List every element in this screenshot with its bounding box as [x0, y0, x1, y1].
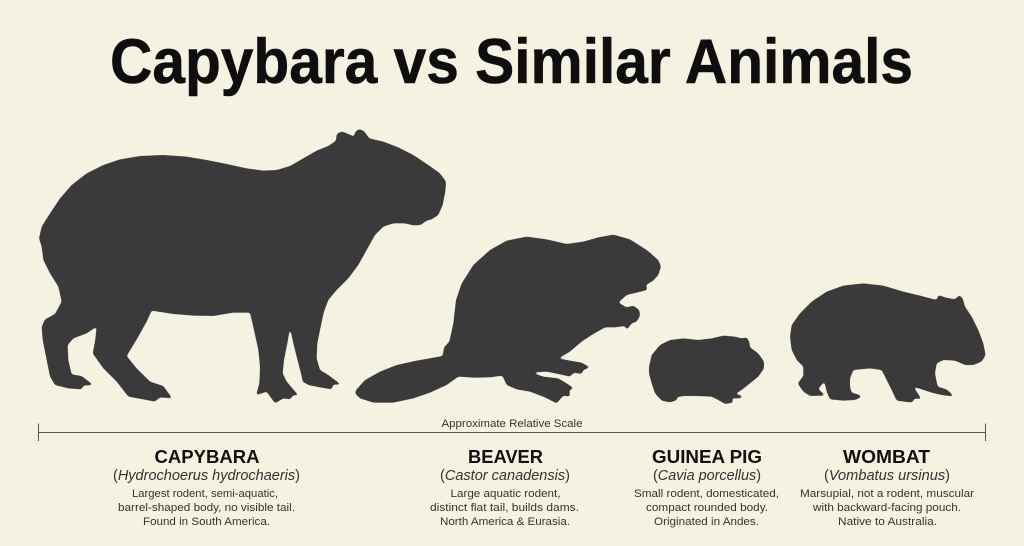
caption: beaver: (Castor canadensis)	[440, 468, 570, 484]
title: Capybara vs Similar Animals	[110, 27, 913, 97]
caption: wombat	[800, 446, 974, 528]
silhouette: capybara	[39, 129, 446, 403]
caption: beaver: Large aquatic rodent,	[450, 488, 560, 500]
caption: beaver: North America & Eurasia.	[440, 516, 570, 528]
caption: wombat: Marsupial, not a rodent, muscular	[800, 488, 974, 500]
silhouette: beaver	[355, 235, 661, 403]
silhouette: guinea pig	[649, 336, 764, 404]
caption: wombat: Native to Australia.	[838, 516, 937, 528]
caption: capybara: CAPYBARA	[154, 446, 260, 467]
caption: wombat: WOMBAT	[843, 446, 931, 467]
caption: capybara: Largest rodent, semi-aquatic,	[132, 488, 278, 500]
caption: guinea pig: Originated in Andes.	[654, 516, 759, 528]
caption: beaver	[430, 446, 579, 528]
caption: guinea pig	[634, 446, 779, 528]
caption: capybara: (Hydrochoerus hydrochaeris)	[113, 468, 300, 484]
caption: guinea pig: Small rodent, domesticated,	[634, 488, 779, 500]
caption: wombat: with backward-facing pouch.	[812, 502, 961, 514]
caption: beaver: distinct flat tail, builds dams.	[430, 502, 579, 514]
caption: beaver: BEAVER	[468, 446, 543, 467]
caption: wombat: (Vombatus ursinus)	[824, 468, 950, 484]
scale bar with end ticks	[38, 424, 986, 441]
silhouette: wombat	[790, 283, 986, 403]
caption: capybara	[113, 446, 300, 528]
caption: guinea pig: GUINEA PIG	[652, 446, 762, 467]
scale label: Approximate Relative Scale	[442, 418, 582, 430]
caption: guinea pig: (Cavia porcellus)	[653, 468, 761, 484]
caption: capybara: barrel-shaped body, no visible tail.	[118, 502, 295, 514]
caption: capybara: Found in South America.	[143, 516, 270, 528]
caption: guinea pig: compact rounded body.	[646, 502, 768, 514]
